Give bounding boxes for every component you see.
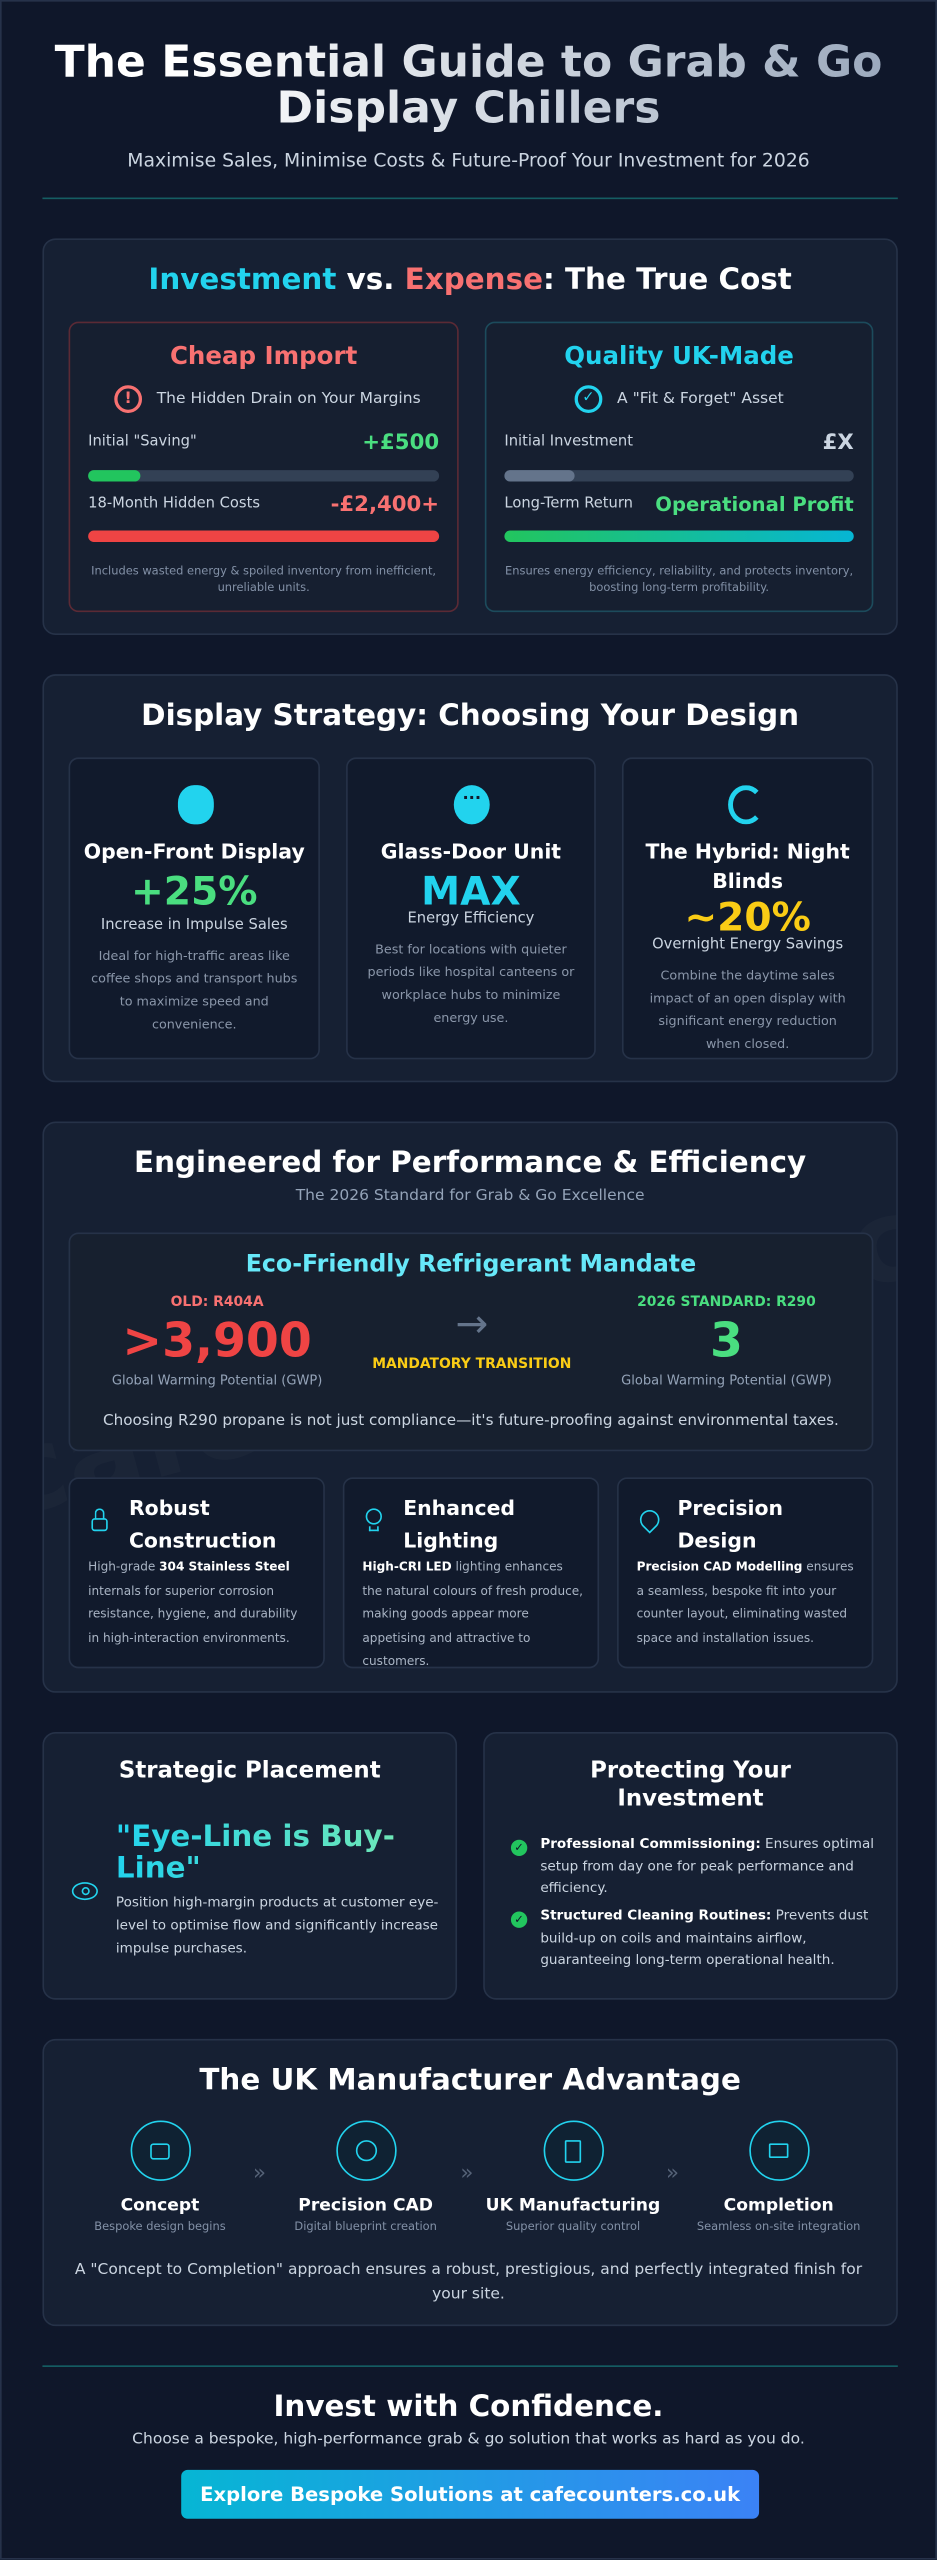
icon: moon: [728, 785, 764, 824]
quote: [116, 1822, 395, 1884]
card: cheap import: 18-Month Hidden Costs: [88, 496, 260, 513]
new refrigerant: [621, 1294, 832, 1388]
card: open-front: Increase in Impulse Sales: [101, 917, 288, 934]
card: glass-door: MAX: [421, 868, 521, 914]
panel: protecting your investment: Protecting Your: [590, 1758, 791, 1784]
card: cheap import: Includes wasted energy & spoiled inventory from inefficient, unreliable units.: [91, 565, 436, 594]
card: quality uk-made: Quality UK-Made: [564, 341, 794, 371]
card: quality uk-made: A "Fit & Forget" Asset: [617, 390, 784, 408]
button: [181, 2470, 759, 2519]
card: robust construction: Robust: [129, 1495, 210, 1520]
card: hybrid: Overnight Energy Savings: [652, 937, 843, 953]
icon: lock: [91, 1518, 108, 1531]
panel: protecting your investment: Investment: [617, 1786, 764, 1812]
card: glass-door: Glass-Door Unit: [381, 839, 561, 864]
icon: speech bubble: ···: [462, 790, 481, 808]
step: completion: Completion: [724, 2196, 834, 2215]
step: concept: Concept: [121, 2196, 199, 2215]
panel: protecting your investment: Professional Commissioning: Ensures optimal setup from day one for peak performance and efficiency.: [540, 1835, 874, 1895]
card: enhanced lighting: Enhanced: [403, 1495, 515, 1520]
heading: Investment vs. Expense: The True Cost: [148, 263, 792, 297]
step: manufacturing: Superior quality control: [506, 2220, 640, 2233]
bullet: cleaning: [511, 1912, 527, 1928]
title: The Essential Guide to Grab & Go: [55, 38, 882, 88]
panel: strategic placement: Strategic Placement: [119, 1758, 381, 1784]
new refrigerant: Global Warming Potential (GWP): [621, 1373, 832, 1388]
card: hybrid: Blinds: [712, 868, 783, 893]
old refrigerant: Global Warming Potential (GWP): [112, 1373, 322, 1388]
card: robust construction: [69, 1477, 325, 1668]
closing text: A "Concept to Completion" approach ensures a robust, prestigious, and perfectly integrated finish for your site.: [75, 2261, 862, 2303]
footer heading: Invest with Confidence.: [274, 2390, 663, 2424]
icon: piggy: [178, 785, 214, 824]
card: quality uk-made: £X: [823, 431, 854, 455]
card: enhanced lighting: [343, 1477, 599, 1668]
card: cheap import: -£2,400+: [331, 493, 439, 517]
card: open-front: [69, 757, 320, 1059]
card: glass-door: [346, 757, 596, 1059]
card: quality uk-made: Operational Profit: [655, 493, 854, 516]
card: cheap import: Initial "Saving": [88, 434, 197, 451]
card: glass-door: Energy Efficiency: [407, 911, 534, 927]
panel: display strategy: [42, 674, 898, 1082]
quote: Line": [116, 1851, 201, 1885]
arrow: transition: →: [455, 1301, 488, 1347]
step: completion: [697, 2120, 860, 2233]
panel: investment vs expense: [42, 238, 898, 635]
arrow: »: [460, 2161, 473, 2186]
icon: check circle: ✓: [582, 390, 595, 406]
subtitle: Maximise Sales, Minimise Costs & Future-Proof Your Investment for 2026: [127, 149, 810, 171]
old refrigerant: >3,900: [122, 1312, 312, 1368]
icon: check circle: [575, 385, 602, 413]
icon: eye: [72, 1882, 98, 1900]
card: robust construction: High-grade 304 Stainless Steel internals for superior corrosion resistance, hygiene, and durability in high-interaction environments.: [88, 1559, 297, 1645]
card: hybrid: [622, 757, 873, 1059]
panel: protecting your investment: Structured Cleaning Routines: Prevents dust build-up on coils and maintains airflow, guaranteeing long-term operational health.: [540, 1907, 868, 1967]
step: concept: [94, 2120, 226, 2233]
footer text: Choose a bespoke, high-performance grab & go solution that works as hard as you do.: [132, 2431, 805, 2449]
step: manufacturing: [486, 2120, 660, 2233]
panel: uk manufacturer advantage: [42, 2039, 898, 2326]
card: quality uk-made: [485, 322, 873, 612]
eco box: [69, 1232, 873, 1451]
new refrigerant: 3: [710, 1312, 743, 1368]
icon: pin: [636, 1506, 664, 1534]
card: cheap import: The Hidden Drain on Your Margins: [157, 390, 421, 408]
icon: warning: [114, 385, 142, 413]
panel: protecting your investment: [483, 1732, 898, 2000]
card: glass-door: Best for locations with quieter periods like hospital canteens or workplace hubs to minimize energy use.: [368, 942, 574, 1025]
step: concept: Bespoke design begins: [94, 2220, 226, 2233]
card: precision design: Precision CAD Modelling ensures a seamless, bespoke fit into your counter layout, eliminating wasted space and installation issues.: [637, 1559, 854, 1645]
card: hybrid: ~20%: [684, 895, 811, 940]
eco box: Eco-Friendly Refrigerant Mandate: [246, 1252, 696, 1278]
card: open-front: Open-Front Display: [84, 839, 305, 864]
card: cheap import: [69, 322, 459, 612]
card: open-front: +25%: [131, 868, 258, 914]
panel: strategic placement: Position high-margin products at customer eye-level to optimise flow and significantly increase impulse purchases.: [116, 1894, 438, 1956]
card: precision design: Precision: [677, 1495, 783, 1520]
button: Explore Bespoke Solutions at cafecounters.co.uk: [200, 2483, 740, 2506]
icon: speech bubble: [454, 785, 490, 824]
arrow: transition: [372, 1301, 571, 1373]
bullet: cleaning: ✓: [514, 1913, 524, 1926]
heading: Display Strategy: Choosing Your Design: [141, 699, 799, 733]
icon: warning: !: [124, 390, 132, 408]
card: quality uk-made: Ensures energy efficiency, reliability, and protects inventory, boosting long-term profitability.: [505, 565, 853, 594]
card: hybrid: The Hybrid: Night: [645, 839, 850, 864]
old refrigerant: [112, 1294, 322, 1388]
step: cad: [294, 2120, 437, 2233]
panel: uk manufacturer advantage: The UK Manufacturer Advantage: [199, 2063, 741, 2098]
card: open-front: Ideal for high-traffic areas like coffee shops and transport hubs to maximize speed and convenience.: [91, 948, 297, 1032]
title: Display Chillers: [277, 83, 660, 134]
card: precision design: Design: [677, 1528, 757, 1552]
card: robust construction: Construction: [129, 1528, 276, 1552]
icon: bulb: [366, 1508, 382, 1525]
eco box: Choosing R290 propane is not just compliance—it's future-proofing against environmental taxes.: [103, 1412, 839, 1430]
card: enhanced lighting: Lighting: [403, 1528, 498, 1552]
card: cheap import: +£500: [362, 431, 439, 455]
panel: engineered: [42, 1121, 898, 1693]
old refrigerant: OLD: R404A: [171, 1294, 264, 1311]
step: cad: Digital blueprint creation: [294, 2220, 437, 2233]
card: precision design: [617, 1477, 873, 1668]
panel: strategic placement: [42, 1732, 457, 2000]
card: cheap import: Cheap Import: [170, 341, 357, 371]
arrow: »: [253, 2161, 266, 2186]
quote: "Eye-Line is Buy-: [116, 1820, 395, 1854]
step: manufacturing: UK Manufacturing: [486, 2196, 660, 2215]
step: completion: Seamless on-site integration: [697, 2220, 860, 2233]
arrow: transition: MANDATORY TRANSITION: [372, 1357, 571, 1373]
arrow: »: [666, 2161, 679, 2186]
new refrigerant: 2026 STANDARD: R290: [637, 1294, 816, 1311]
bullet: commissioning: [511, 1840, 527, 1856]
card: enhanced lighting: High-CRI LED lighting enhances the natural colours of fresh produce, making goods appear more appetising and attractive to customers.: [362, 1559, 583, 1668]
heading: Engineered for Performance & Efficiency: [134, 1146, 806, 1180]
card: quality uk-made: Initial Investment: [504, 434, 633, 451]
card: quality uk-made: Long-Term Return: [504, 496, 633, 513]
subheading: The 2026 Standard for Grab & Go Excellence: [296, 1187, 645, 1205]
card: hybrid: Combine the daytime sales impact of an open display with significant energy reduction when closed.: [650, 968, 846, 1051]
step: cad: Precision CAD: [298, 2196, 433, 2215]
title: [2, 41, 935, 132]
bullet: commissioning: ✓: [514, 1841, 524, 1854]
